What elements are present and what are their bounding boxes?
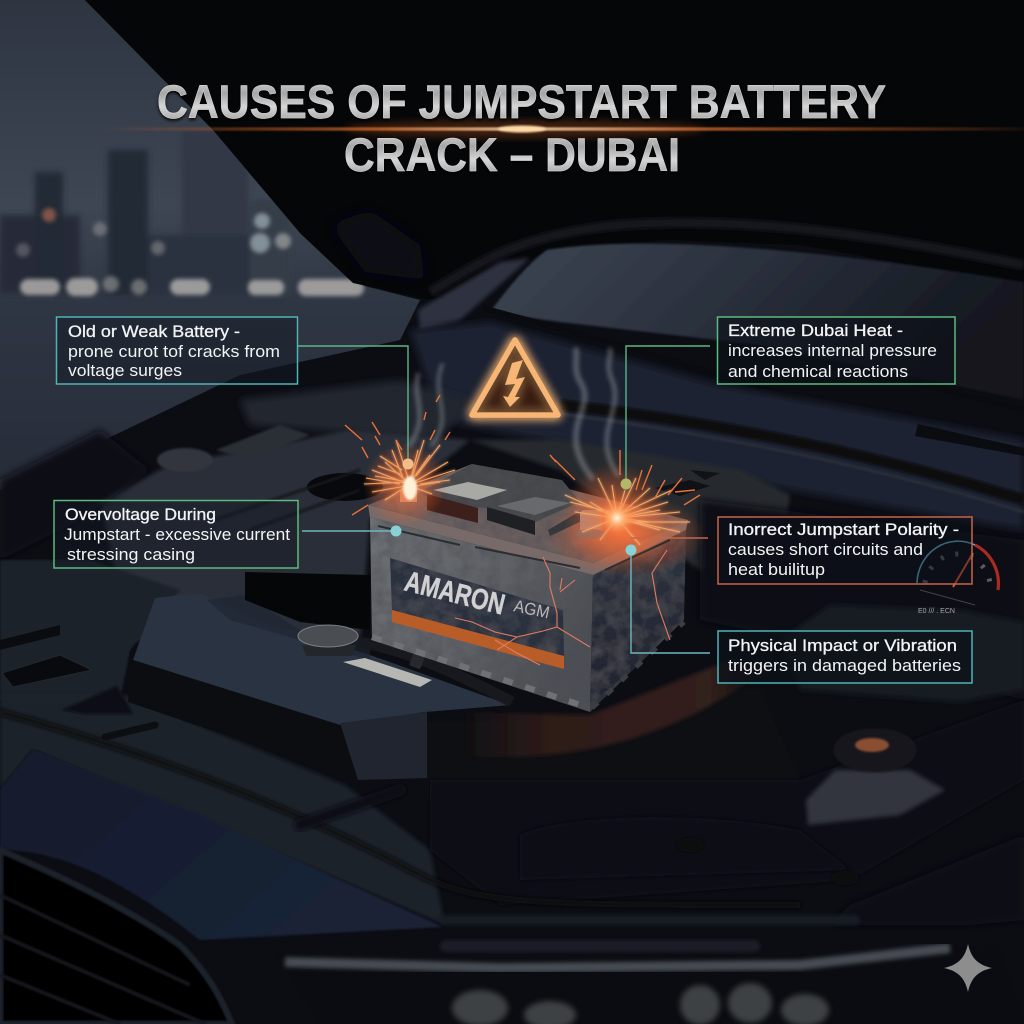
warning triangle icon <box>472 340 558 415</box>
left spark burst <box>345 395 455 527</box>
callout: overvoltage during jumpstart <box>54 500 298 568</box>
left block face <box>427 494 478 523</box>
radiator cap and hose <box>298 625 512 702</box>
windshield <box>418 244 1024 410</box>
connector: polarity <box>630 537 708 539</box>
callout: old or weak battery: Old or Weak Battery - <box>68 323 240 341</box>
right mottled top <box>497 497 570 515</box>
callout: old or weak battery: prone curot tof cracks from <box>68 343 280 361</box>
white top label <box>433 482 507 500</box>
cracks <box>455 550 670 665</box>
icon: sparkle watermark <box>944 944 992 992</box>
background: dusk sky with blurred Dubai skyline <box>0 0 420 490</box>
brand panel <box>390 558 564 656</box>
negative terminal <box>400 490 417 502</box>
battery front face <box>370 517 593 712</box>
callout: old or weak battery <box>56 317 298 384</box>
callout: extreme dubai heat: increases internal pressure <box>728 342 937 360</box>
brake fluid reservoir <box>806 728 945 825</box>
callout: overvoltage during jumpstart: Jumpstart - excessive current <box>64 526 290 544</box>
engine cover, left <box>0 425 470 640</box>
connector: physical impact <box>626 544 710 653</box>
end block <box>548 510 584 536</box>
headlight <box>275 945 1024 1024</box>
AGM label: AGM <box>512 596 551 622</box>
intake duct and black plastics <box>0 560 1024 925</box>
right spark burst <box>550 450 700 567</box>
connector: extreme heat <box>620 346 710 490</box>
callout: extreme dubai heat: Extreme Dubai Heat - <box>728 322 903 340</box>
callout: incorrect jumpstart polarity: causes short circuits and <box>728 541 923 559</box>
callout: physical impact or vibration: triggers in damaged batteries <box>728 657 961 675</box>
callout: old or weak battery: voltage surges <box>68 362 182 380</box>
raised top <box>420 464 580 522</box>
base teeth <box>372 637 590 708</box>
orange band <box>392 610 564 669</box>
lower engine shapes <box>440 817 860 952</box>
hood underside <box>85 0 1024 300</box>
callout: extreme dubai heat: and chemical reactions <box>728 363 908 381</box>
dashboard gauge <box>917 541 998 615</box>
battery lid <box>368 464 688 563</box>
base right edge <box>592 622 684 708</box>
callout: incorrect jumpstart polarity: heat builitup <box>728 561 825 579</box>
engine bay rear: cowl and rails <box>240 322 1024 530</box>
title line 1: CAUSES OF JUMPSTART BATTERY <box>157 75 886 128</box>
positive terminal <box>576 510 606 539</box>
grille <box>0 850 232 1024</box>
smoke wisps <box>410 350 618 478</box>
callout: extreme dubai heat <box>718 317 955 384</box>
right wing, navy <box>830 835 1024 925</box>
callout: incorrect jumpstart polarity <box>718 517 972 584</box>
battery right side face <box>590 530 686 712</box>
dashboard gauge: E0 /// . ECN <box>918 608 955 615</box>
engine cover, right <box>470 440 1024 702</box>
right block face <box>487 507 535 535</box>
connector: overvoltage <box>302 526 402 536</box>
front wing, navy <box>0 750 443 940</box>
lid edge <box>368 505 688 575</box>
title flare line <box>100 120 1024 138</box>
lip lines <box>378 526 670 570</box>
brown reflection band <box>460 660 770 757</box>
title line 2: CRACK – DUBAI <box>344 128 680 181</box>
callout: overvoltage during jumpstart: stressing casing <box>67 546 195 564</box>
battery <box>368 464 705 712</box>
title <box>100 75 1024 181</box>
callout: physical impact or vibration: Physical Impact or Vibration <box>728 637 957 655</box>
callout: physical impact or vibration <box>718 631 972 683</box>
brand name: AMARON <box>401 566 508 621</box>
callout: incorrect jumpstart polarity: Inorrect Jumpstart Polarity - <box>728 521 959 539</box>
connector: old battery <box>297 346 414 470</box>
callout: overvoltage during jumpstart: Overvoltage During <box>65 506 216 524</box>
lid heat tint <box>545 493 705 577</box>
